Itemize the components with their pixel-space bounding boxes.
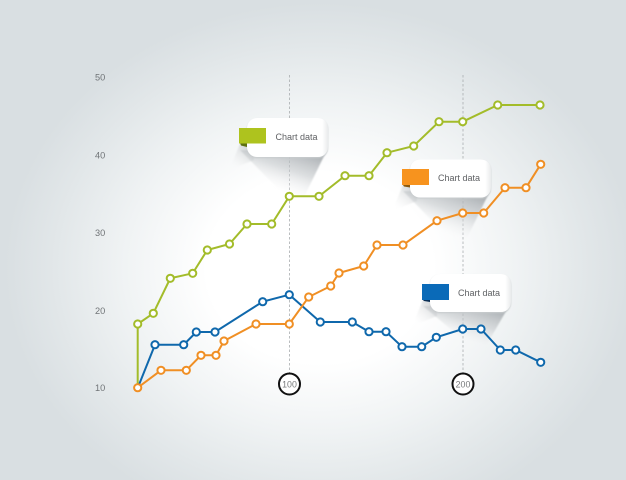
y axis labels: 50 — [95, 72, 105, 82]
x axis marker: 200 — [452, 374, 474, 394]
callout: green — [229, 118, 328, 197]
y axis labels: 40 — [95, 150, 105, 160]
callout: orange: Chart data — [438, 173, 480, 183]
y axis labels: 10 — [95, 383, 105, 393]
y axis labels: 30 — [95, 228, 105, 238]
callout: blue: Chart data — [458, 288, 500, 298]
line series: green — [134, 101, 544, 388]
callout: green: Chart data — [276, 132, 318, 142]
line series: blue — [138, 291, 544, 388]
callout: blue — [412, 274, 511, 346]
x axis marker: 100: 100 — [282, 379, 297, 389]
dashed guide lines — [290, 75, 463, 373]
x axis marker: 100 — [279, 374, 300, 394]
line series: orange — [134, 161, 544, 391]
callout: orange — [392, 160, 491, 238]
y axis labels — [95, 72, 105, 393]
x axis marker: 200: 200 — [456, 379, 470, 389]
y axis labels: 20 — [95, 306, 105, 316]
